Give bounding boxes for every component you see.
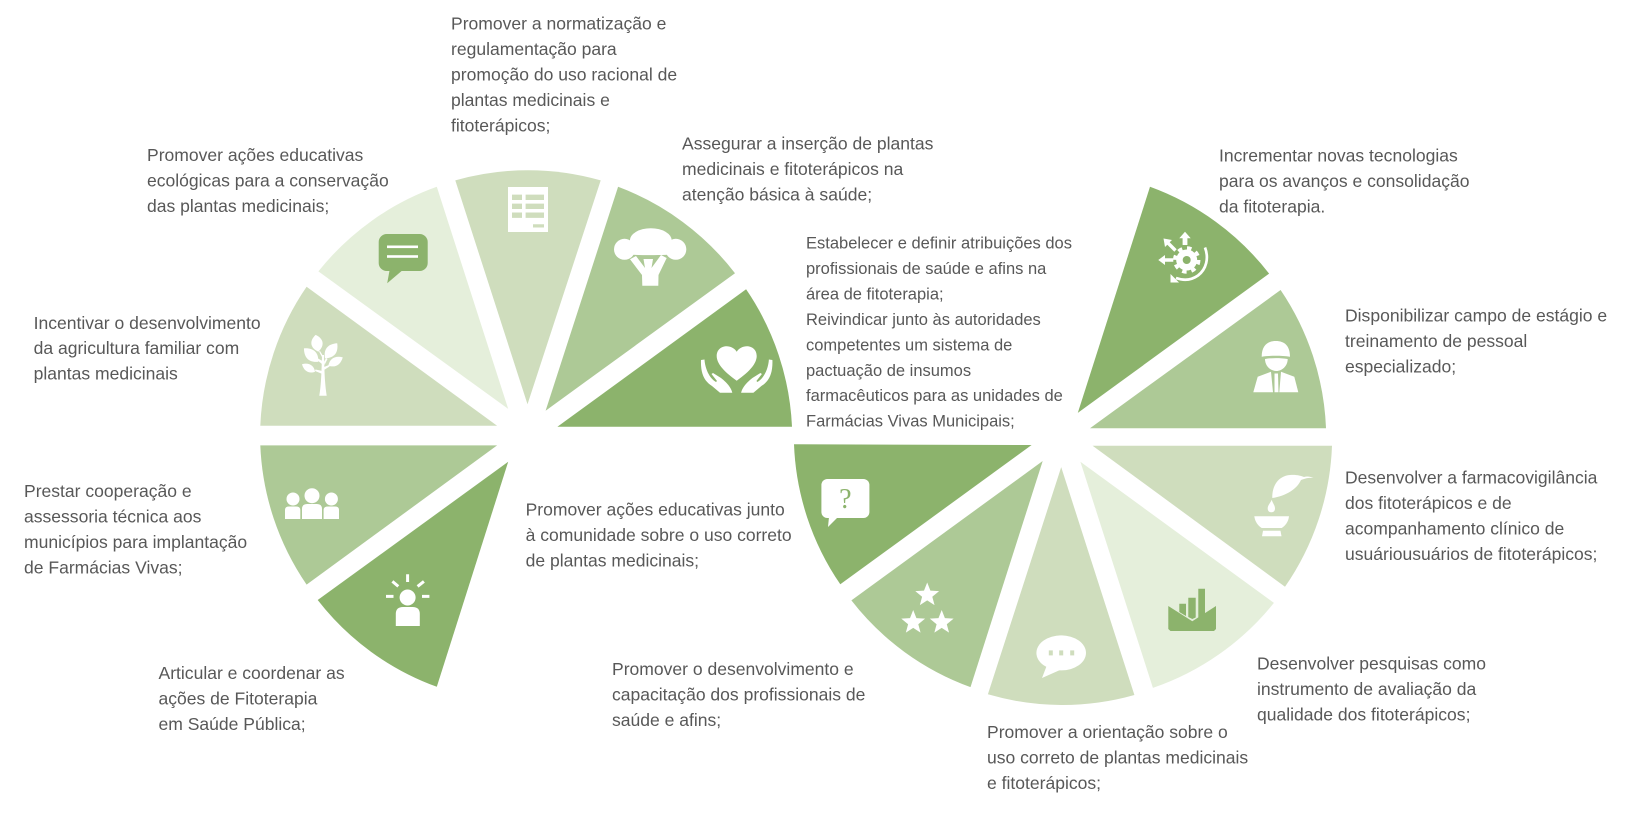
text: farmacovigilância: dos fitoterápicos e de [1345,493,1512,513]
text: atribuições e pactuação: competentes um sistema de [806,336,1012,354]
text: pesquisas: instrumento de avaliação da [1257,679,1477,699]
text: ações ecológicas: Promover ações educativas [147,145,364,165]
text: normatização: promoção do uso racional de [451,64,677,84]
text: agricultura familiar: plantas medicinais [34,364,178,384]
text: normatização: plantas medicinais e [451,90,610,110]
text: pesquisas: Desenvolver pesquisas como [1257,654,1486,674]
text: articular e coordenar: Articular e coordenar as [158,663,345,683]
icon: heart in hands [701,346,772,393]
text: cooperação e assessoria: Prestar cooperação e [24,481,192,501]
text: atribuições e pactuação: farmacêuticos para as unidades de [806,387,1063,405]
icon: gears and arrows [1158,232,1207,282]
text: ações ecológicas: das plantas medicinais; [147,196,329,216]
icon: broccoli [614,228,686,286]
icon: worker [1253,341,1298,392]
text: novas tecnologias: Incrementar novas tecnologias [1219,146,1458,166]
text: atribuições e pactuação: área de fitoterapia; [806,286,944,304]
text: orientação: e fitoterápicos; [987,773,1101,793]
text: campo de estágio: Disponibilizar campo de estágio e [1345,306,1607,326]
text: agricultura familiar: Incentivar o desenvolvimento [34,313,261,333]
text: campo de estágio: treinamento de pessoal [1345,331,1527,351]
wedge: people [260,445,497,585]
text: campo de estágio: especializado; [1345,356,1456,376]
text: ações junto à comunidade: Promover ações educativas junto [526,500,785,520]
icon: chart envelope [1168,589,1216,631]
text: orientação: Promover a orientação sobre o [987,722,1228,742]
text: cooperação e assessoria: municípios para implantação [24,532,247,552]
wedge: question [794,444,1032,584]
left wheel [260,170,792,687]
text: normatização: fitoterápicos; [451,116,550,136]
text: atenção básica: Assegurar a inserção de plantas [682,134,934,154]
wedge: document [455,170,601,404]
wedge: worker [1090,290,1326,428]
text: cooperação e assessoria: de Farmácias Vivas; [24,558,182,578]
text: normatização: regulamentação para [451,39,617,59]
text: capacitação: Promover o desenvolvimento e [612,659,854,679]
text: cooperação e assessoria: assessoria técnica aos [24,506,202,526]
right wheel [794,187,1332,705]
icon: people [285,488,339,519]
text: farmacovigilância: acompanhamento clínico de [1345,518,1564,538]
text: ações junto à comunidade: de plantas medicinais; [526,550,699,570]
text: orientação: uso correto de plantas medicinais [987,748,1248,768]
text: novas tecnologias: da fitoterapia. [1219,196,1325,216]
text: normatização: Promover a normatização e [451,14,666,34]
icon: person with rays [386,574,429,626]
wedge: broccoli [546,187,735,411]
wedge: chart envelope [1080,462,1274,688]
wedge: speech dots [988,467,1134,705]
text: atribuições e pactuação: Farmácias Vivas Municipais; [806,412,1015,430]
wedge: person with rays [318,462,508,687]
text: agricultura familiar: da agricultura familiar com [34,338,239,358]
text: atribuições e pactuação: Reivindicar junto às autoridades [806,311,1041,329]
wedge: tree [260,287,497,426]
text: farmacovigilância: Desenvolver a farmacovigilância [1345,468,1598,488]
text: atenção básica: medicinais e fitoterápicos na [682,159,903,179]
text: capacitação: saúde e afins; [612,710,721,730]
wedge: gears [1078,187,1269,413]
text: atribuições e pactuação: pactuação de insumos [806,362,971,380]
icon: question bubble: ? [839,484,852,515]
wedge: leaf and bowl [1093,446,1332,587]
text: articular e coordenar: em Saúde Pública; [158,714,306,734]
wedge: heart hands [557,289,792,427]
icon: chat bubble [379,234,428,283]
icon: document [508,187,548,232]
icon: tree [300,334,345,396]
text: ações ecológicas: ecológicas para a conservação [147,170,389,190]
text: capacitação: capacitação dos profissionais de [612,684,865,704]
text: atenção básica: atenção básica à saúde; [682,184,872,204]
text: novas tecnologias: para os avanços e consolidação [1219,171,1470,191]
text: atribuições e pactuação: profissionais de saúde e afins na [806,260,1047,278]
wedge: stars [851,461,1043,687]
icon: leaf and bowl [1254,475,1314,536]
text: ações junto à comunidade: à comunidade sobre o uso correto [526,525,792,545]
icon: stars [901,582,954,633]
icon: speech dots [1036,635,1086,678]
text: atribuições e pactuação: Estabelecer e definir atribuições dos [806,234,1072,252]
text: articular e coordenar: ações de Fitoterapia [158,688,318,708]
text: farmacovigilância: usuáriousuários de fitoterápicos; [1345,544,1597,564]
wedge: chat [318,187,508,409]
icon: question bubble [821,479,869,527]
text: pesquisas: qualidade dos fitoterápicos; [1257,704,1470,724]
